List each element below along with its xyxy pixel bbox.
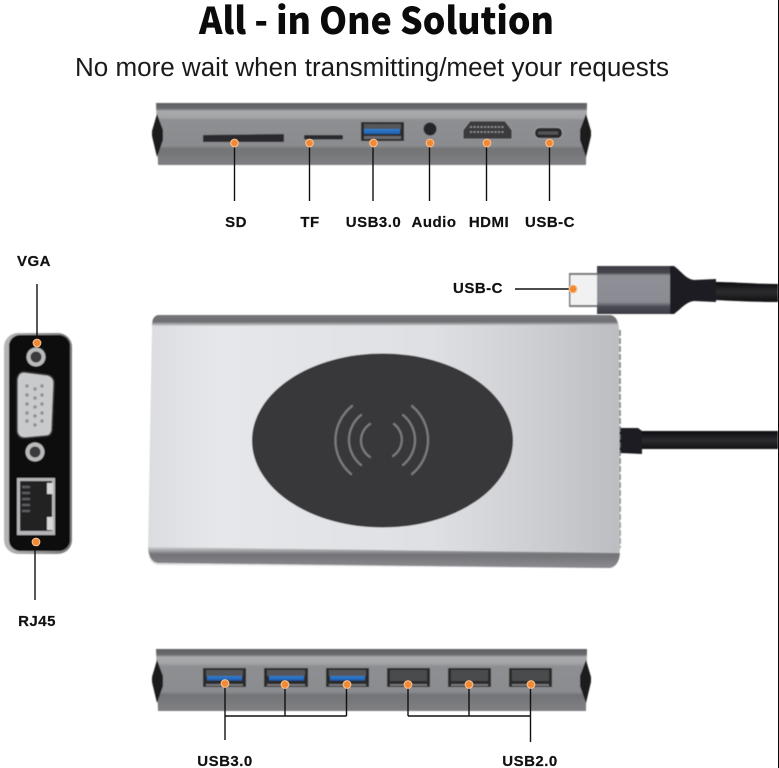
cable strand — [640, 431, 778, 449]
callout: VGA — [17, 253, 51, 347]
wireless charging oval — [252, 354, 513, 528]
callout: USB3.0 top — [346, 139, 401, 231]
callout: SD: SD — [225, 214, 247, 231]
end plate black face — [9, 335, 70, 551]
right border line — [778, 0, 779, 768]
hub side bar (bottom) — [156, 649, 587, 711]
callout: USB3.0 top: USB3.0 — [346, 214, 401, 231]
callout: USB-C cable — [453, 280, 577, 297]
callout: VGA: VGA — [17, 253, 51, 270]
metal collar — [597, 266, 670, 314]
vent edge — [619, 330, 621, 548]
left end cap — [152, 660, 163, 703]
cable boot — [619, 428, 642, 454]
callout: USB2.0 bracket — [404, 681, 558, 768]
USB 2.0 port 1 — [387, 668, 430, 687]
callout: Audio — [412, 139, 456, 231]
panel: bottom side of hub with USB ports — [152, 649, 591, 711]
audio jack — [424, 122, 436, 136]
VGA connector — [17, 372, 54, 438]
left end cap — [152, 114, 163, 157]
callout: USB-C top — [525, 139, 575, 231]
callout: RJ45 — [18, 538, 56, 630]
panel: VGA and RJ45 end of hub — [4, 333, 72, 554]
callout: TF — [300, 139, 320, 231]
callout: SD — [225, 139, 247, 231]
icon: wireless waves — [335, 406, 428, 474]
USB 3.0 port — [361, 122, 404, 141]
hub face — [148, 315, 620, 568]
callout: USB-C top: USB-C — [525, 214, 575, 231]
HDMI port — [463, 121, 512, 139]
callout: HDMI — [469, 139, 509, 231]
side cable from hub — [619, 428, 778, 454]
callout: HDMI: HDMI — [469, 214, 509, 231]
top bevel — [152, 315, 618, 326]
USB 3.0 port 2 — [264, 668, 308, 687]
panel: top side of hub with ports — [152, 103, 591, 165]
USB 2.0 port 3 — [509, 668, 552, 687]
USB 3.0 port 3 — [326, 668, 369, 687]
SD slot — [203, 134, 284, 142]
callout: TF: TF — [300, 214, 320, 231]
cable — [714, 282, 778, 302]
VGA bottom screw — [26, 442, 44, 462]
hub side bar (top) — [156, 103, 587, 165]
end plate outer — [4, 333, 72, 554]
callout: RJ45: RJ45 — [18, 613, 56, 630]
plug tip — [569, 273, 597, 307]
callout: USB3.0 bracket — [197, 680, 351, 768]
subtitle: No more wait when transmitting/meet your requests — [75, 54, 669, 82]
callout: Audio: Audio — [412, 214, 456, 231]
main hub body — [148, 315, 620, 568]
right end cap — [580, 114, 591, 157]
USB-C port — [534, 128, 562, 138]
RJ45 port — [17, 478, 55, 535]
USB 2.0 port 2 — [448, 668, 491, 687]
right end cap — [580, 660, 591, 703]
strain relief — [670, 266, 716, 314]
callout: USB-C cable: USB-C — [453, 280, 503, 297]
bottom bevel — [148, 547, 620, 568]
USB 3.0 port 1 — [203, 668, 246, 687]
VGA top screw — [26, 348, 46, 366]
USB-C cable and plug — [569, 266, 778, 314]
TF slot — [304, 135, 343, 140]
